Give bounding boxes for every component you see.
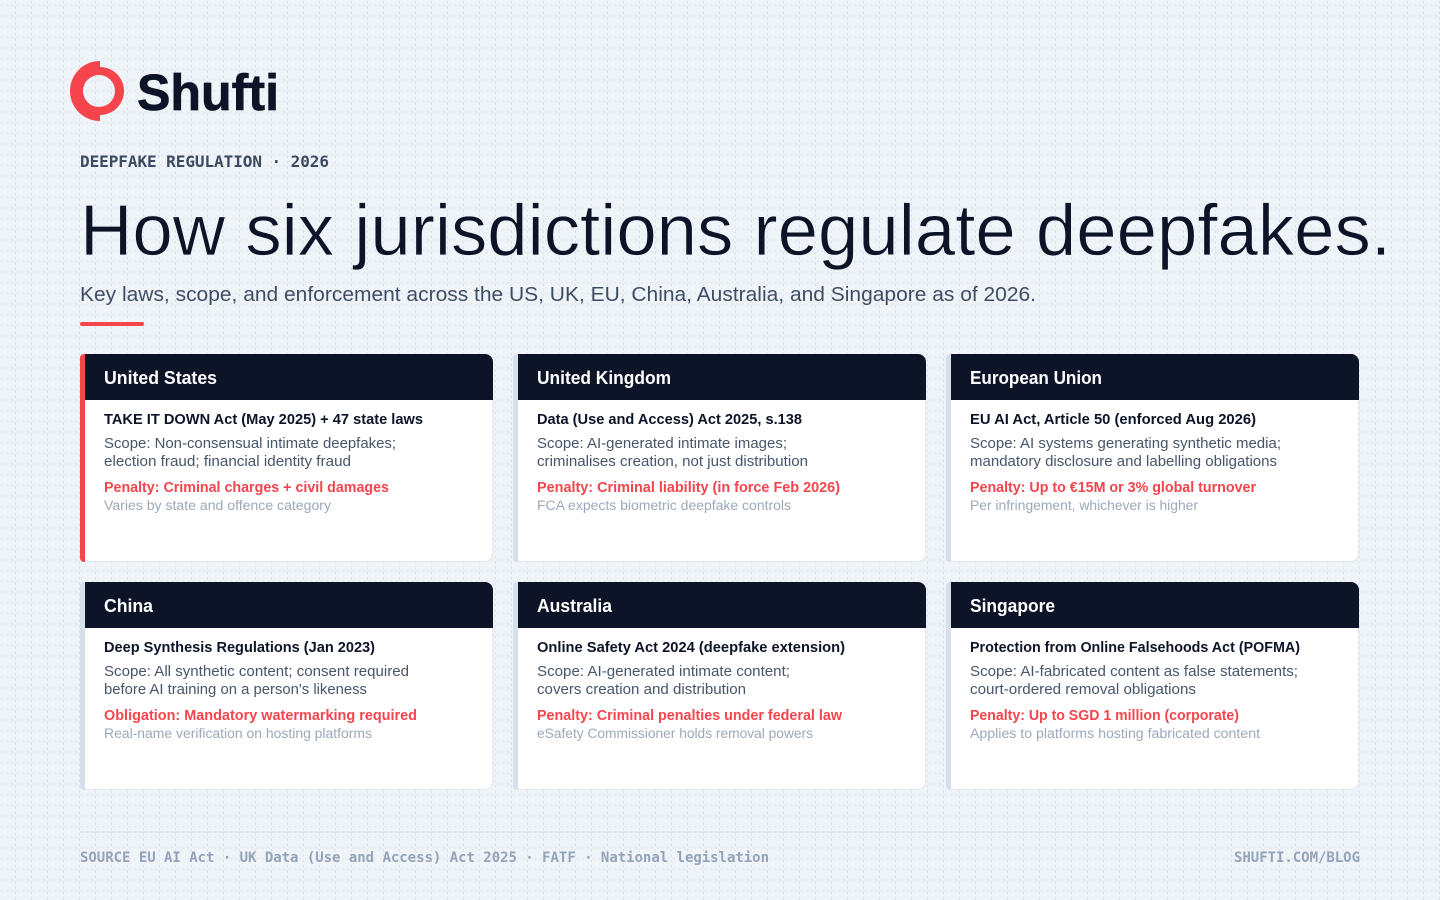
card header <box>951 354 1359 400</box>
scope line 2: court-ordered removal obligations <box>970 682 1196 698</box>
note: Real-name verification on hosting platforms <box>104 726 372 741</box>
law name: TAKE IT DOWN Act (May 2025) + 47 state laws <box>104 412 423 428</box>
scope line 2: criminalises creation, not just distribution <box>537 454 808 470</box>
footer: source: SOURCE EU AI Act · UK Data (Use and Access) Act 2025 · FATF · National legislation <box>80 850 769 866</box>
footer: site link: SHUFTI.COM/BLOG <box>1234 850 1360 866</box>
jurisdiction name: Singapore <box>970 596 1055 616</box>
title: How six jurisdictions regulate deepfakes. <box>80 190 1391 271</box>
scope line 2: mandatory disclosure and labelling obligations <box>970 454 1277 470</box>
logo: Shufti <box>70 61 279 121</box>
panel: Australia <box>513 582 926 790</box>
note: Per infringement, whichever is higher <box>970 498 1199 513</box>
card header <box>951 582 1359 628</box>
law name: Protection from Online Falsehoods Act (POFMA) <box>970 640 1300 656</box>
card header <box>85 354 493 400</box>
scope: Scope: AI-generated intimate content; <box>537 664 790 680</box>
penalty: Penalty: Up to SGD 1 million (corporate) <box>970 708 1239 724</box>
jurisdiction name: United Kingdom <box>537 368 671 388</box>
law name: Data (Use and Access) Act 2025, s.138 <box>537 412 802 428</box>
law name: Deep Synthesis Regulations (Jan 2023) <box>104 640 375 656</box>
penalty: Penalty: Up to €15M or 3% global turnover <box>970 480 1256 496</box>
panel: European Union <box>946 354 1359 562</box>
icon: red ring <box>70 61 124 121</box>
panel: Singapore <box>946 582 1359 790</box>
scope: Scope: All synthetic content; consent required <box>104 664 409 680</box>
jurisdiction name: China <box>104 596 154 616</box>
scope: Scope: AI-generated intimate images; <box>537 436 787 452</box>
penalty: Penalty: Criminal liability (in force Feb 2026) <box>537 480 840 496</box>
scope: Scope: AI systems generating synthetic media; <box>970 436 1281 452</box>
note: Applies to platforms hosting fabricated content <box>970 726 1260 741</box>
jurisdiction name: European Union <box>970 368 1102 388</box>
scope line 2: covers creation and distribution <box>537 682 746 698</box>
card header <box>518 582 926 628</box>
subtitle: Key laws, scope, and enforcement across the US, UK, EU, China, Australia, and Singapore as of 2026. <box>80 284 1036 306</box>
card header <box>518 354 926 400</box>
eyebrow: DEEPFAKE REGULATION · 2026 <box>80 152 329 171</box>
scope: Scope: Non-consensual intimate deepfakes; <box>104 436 396 452</box>
panel: United Kingdom <box>513 354 926 562</box>
scope: Scope: AI-fabricated content as false statements; <box>970 664 1298 680</box>
panel: China <box>80 582 493 790</box>
obligation: Obligation: Mandatory watermarking required <box>104 708 417 724</box>
note: FCA expects biometric deepfake controls <box>537 498 791 513</box>
panel: United States <box>80 354 493 562</box>
jurisdiction name: United States <box>104 368 217 388</box>
note: Varies by state and offence category <box>104 498 331 513</box>
accent bar <box>80 322 144 326</box>
card header <box>85 582 493 628</box>
jurisdiction name: Australia <box>537 596 613 616</box>
scope line 2: election fraud; financial identity fraud <box>104 454 351 470</box>
scope line 2: before AI training on a person's likeness <box>104 682 367 698</box>
logo wordmark: Shufti <box>137 64 279 121</box>
law name: EU AI Act, Article 50 (enforced Aug 2026) <box>970 412 1256 428</box>
law name: Online Safety Act 2024 (deepfake extension) <box>537 640 845 656</box>
note: eSafety Commissioner holds removal powers <box>537 726 813 741</box>
penalty: Penalty: Criminal charges + civil damages <box>104 480 389 496</box>
penalty: Penalty: Criminal penalties under federal law <box>537 708 843 724</box>
